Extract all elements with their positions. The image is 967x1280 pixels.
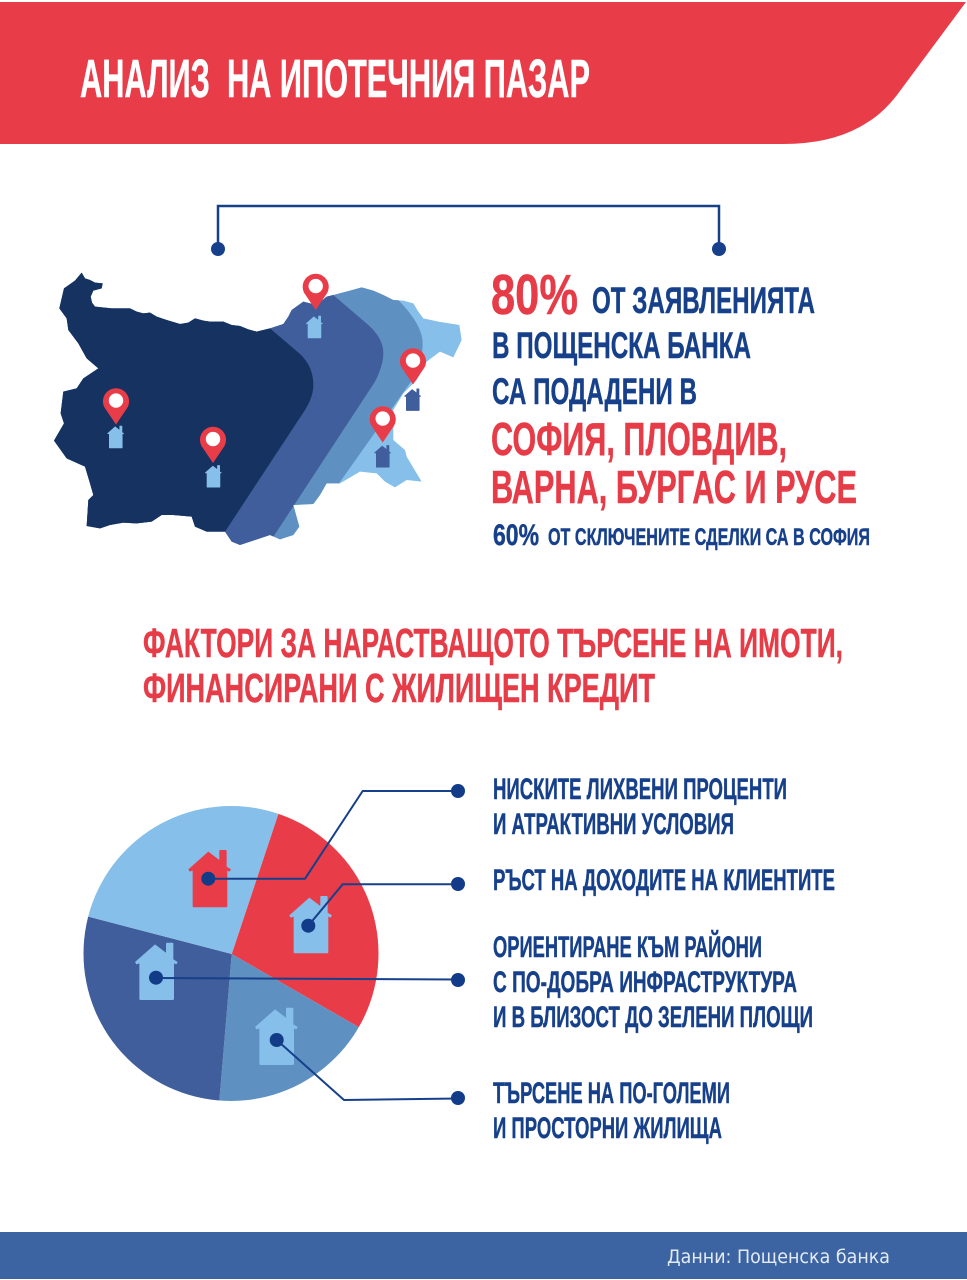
bracket connector <box>211 206 726 256</box>
map markers: Burgas <box>370 406 396 468</box>
map markers: Ruse <box>303 274 329 338</box>
map markers: Plovdiv <box>200 427 226 488</box>
80 percent figure: 80% <box>491 263 578 327</box>
line: в Пощенска банка: В ПОЩЕНСКА БАНКА <box>492 324 751 366</box>
icon: house on red slice <box>289 896 332 953</box>
map markers: Sofia <box>103 388 129 448</box>
60 percent figure: 60% <box>493 519 539 552</box>
cities line 1: СОФИЯ, ПЛОВДИВ, <box>491 413 787 465</box>
line: от заявленията: ОТ ЗАЯВЛЕНИЯТА <box>592 279 815 321</box>
factor 1 <box>493 773 787 841</box>
factor 4 <box>493 1077 730 1145</box>
footer bar <box>0 1232 967 1279</box>
factor 3: ОРИЕНТИРАНЕ КЪМ РАЙОНИ <box>493 930 762 964</box>
source note: Данни: Пощенска банка <box>667 1246 890 1268</box>
line: са подадени в: СА ПОДАДЕНИ В <box>492 370 697 412</box>
factor 1: И АТРАКТИВНИ УСЛОВИЯ <box>493 808 734 841</box>
icon: house on dark slice <box>135 943 178 1000</box>
header banner <box>0 2 966 144</box>
title: АНАЛИЗ НА ИПОТЕЧНИЯ ПАЗАР <box>80 49 590 109</box>
factor 1: НИСКИТЕ ЛИХВЕНИ ПРОЦЕНТИ <box>493 773 787 806</box>
section heading: ФИНАНСИРАНИ С ЖИЛИЩЕН КРЕДИТ <box>143 665 655 711</box>
statistics text block <box>491 263 870 552</box>
section heading <box>143 620 843 711</box>
factor 3 <box>493 930 813 1034</box>
factor list <box>493 773 835 1145</box>
factor 4: И ПРОСТОРНИ ЖИЛИЩА <box>493 1112 722 1145</box>
factor 3: С ПО-ДОБРА ИНФРАСТРУКТУРА <box>493 966 797 999</box>
leader lines <box>149 784 465 1105</box>
map of Bulgaria <box>54 272 462 545</box>
factor 4: ТЪРСЕНЕ НА ПО-ГОЛЕМИ <box>493 1077 730 1110</box>
pie chart <box>84 806 378 1101</box>
icon: house red <box>188 850 231 907</box>
map markers: Varna <box>400 348 426 411</box>
icon: house on mid slice <box>255 1008 298 1065</box>
